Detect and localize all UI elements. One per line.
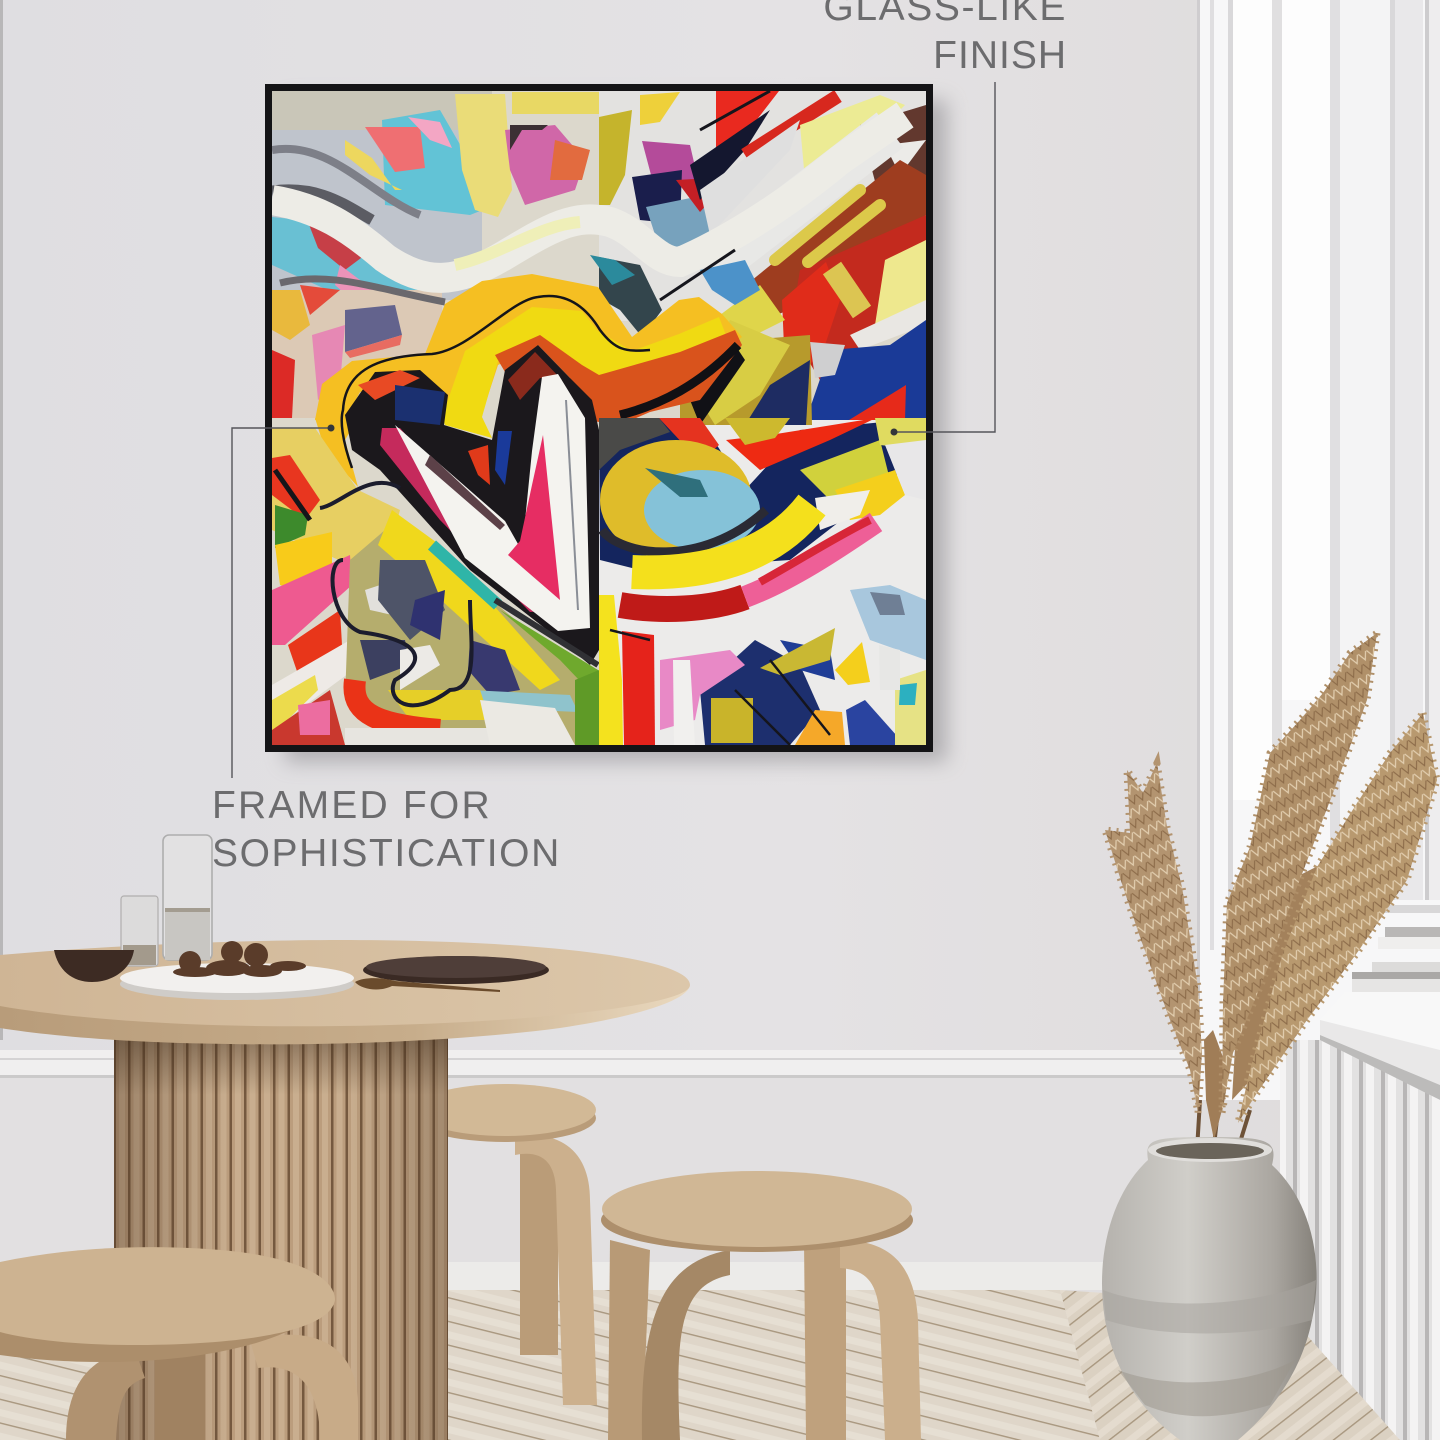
floor — [0, 1290, 1400, 1440]
right plume — [1238, 713, 1437, 1123]
leader line — [895, 82, 995, 432]
gray brush strokes — [272, 149, 420, 215]
plume overlap shadow — [1232, 860, 1330, 1100]
drinking glass — [121, 896, 158, 966]
fluted pedestal — [114, 1035, 448, 1440]
marble tray — [120, 963, 354, 1000]
bright yellow inner arch — [442, 307, 732, 438]
dark bowl — [54, 950, 134, 982]
abstract artwork — [272, 91, 926, 745]
magenta arm under the white — [380, 428, 534, 612]
white heart V — [395, 374, 590, 631]
wavy white band — [272, 115, 905, 278]
wide diagonal white stroke — [804, 112, 900, 172]
yellow band — [632, 505, 812, 572]
black teal diagonal and green streak — [432, 545, 498, 605]
dark heart mass — [345, 345, 599, 665]
lower-left quadrant blocks — [272, 428, 400, 565]
radiator — [1280, 1040, 1440, 1440]
leader line — [232, 428, 331, 778]
label: framed for sophistication: SOPHISTICATION — [212, 832, 561, 875]
stacked books — [1352, 927, 1440, 994]
fine black accents — [610, 630, 830, 745]
nuts — [173, 941, 306, 977]
blue oval — [644, 470, 760, 550]
front left stool — [0, 1247, 358, 1440]
orange red band — [495, 330, 742, 425]
red to pink band — [620, 597, 745, 609]
centre plume — [1222, 633, 1377, 1113]
label: glass-like finish: FINISH — [933, 34, 1067, 77]
pampas grass — [1105, 633, 1437, 1155]
olive and dark mid band — [680, 335, 812, 425]
ceramic vase — [1102, 1137, 1317, 1440]
table top — [0, 940, 690, 1044]
wave teal dark arc — [599, 257, 662, 337]
front right stool — [601, 1171, 921, 1440]
yellow patch — [835, 642, 870, 685]
tableware — [54, 835, 549, 1000]
callout: glass-like finish — [823, 0, 1067, 436]
yellow oval — [600, 440, 752, 560]
spoon — [355, 978, 500, 992]
pink centre — [508, 435, 560, 600]
olive patch — [711, 698, 753, 743]
glass carafe — [163, 835, 212, 960]
arcs lines — [320, 483, 472, 705]
frame — [265, 84, 933, 752]
framed painting — [265, 84, 933, 752]
yellow green upper right blocks — [800, 440, 890, 500]
yellow and red vertical strips — [599, 595, 623, 745]
thin black curve over the arch — [342, 296, 650, 468]
pink patch — [660, 650, 745, 730]
top-left quadrant blocks — [272, 91, 492, 131]
label: framed for sophistication: FRAMED FOR — [212, 784, 492, 827]
dark blue strokes — [700, 640, 820, 745]
central glazed ellipse area — [345, 530, 598, 745]
top-right quadrant blocks — [599, 91, 926, 321]
painting shadow — [285, 100, 947, 762]
short dark plume — [1204, 1030, 1224, 1140]
window and white trim — [1197, 0, 1440, 1100]
wooden plate — [363, 956, 549, 984]
round table with fluted base — [0, 940, 690, 1440]
left plume — [1105, 763, 1202, 1113]
back stool — [414, 1084, 597, 1405]
yellow orange arch — [315, 274, 742, 420]
orange red blob bottom left — [354, 680, 440, 730]
callout: framed for sophistication — [212, 424, 561, 875]
wainscot and skirting — [0, 1050, 1200, 1290]
bottom-right quadrant blocks — [599, 418, 926, 570]
light blue patch — [850, 585, 926, 660]
